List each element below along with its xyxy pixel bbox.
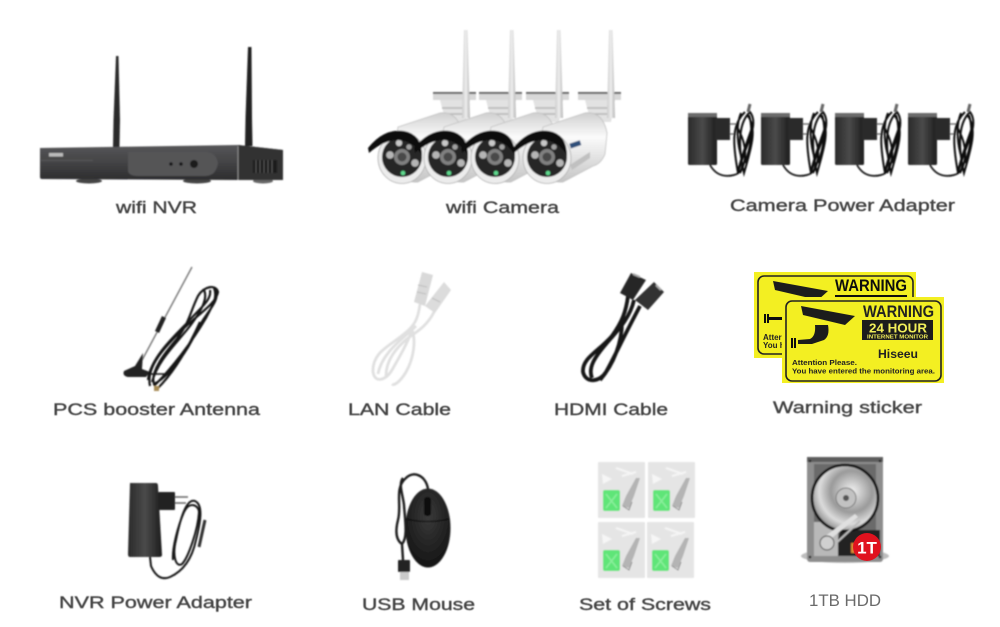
icon: four camera power adapters: [688, 104, 973, 176]
panel: wifi Camera: [368, 30, 621, 217]
icon: back warning sticker: Atter: [763, 333, 782, 342]
icon: booster antenna with coiled cable: [124, 267, 218, 391]
label: wifi NVR: wifi NVR: [115, 198, 197, 217]
panel: LAN Cable: [348, 272, 451, 419]
icon: front warning sticker: WARNING: [863, 303, 934, 321]
icon: wifi NVR recorder: [40, 47, 283, 184]
label: LAN Cable: LAN Cable: [348, 400, 451, 419]
panel: PCS booster Antenna: [53, 267, 261, 419]
icon: white LAN cable: [373, 272, 451, 384]
label: wifi Camera: wifi Camera: [445, 198, 560, 217]
icon: front warning sticker: [782, 297, 944, 383]
icon: front warning sticker: You have entered the monitoring area.: [792, 366, 935, 376]
icon: front warning sticker: 24 HOUR: [869, 320, 928, 336]
badge: 1T: 1T: [857, 538, 878, 558]
icon: four screw bags: [598, 462, 695, 578]
label: HDMI Cable: HDMI Cable: [554, 400, 668, 419]
label: Camera Power Adapter: Camera Power Adapter: [730, 196, 955, 215]
badge: 1T: [853, 533, 881, 561]
label: Warning sticker: Warning sticker: [773, 398, 922, 417]
icon: front warning sticker: INTERNET MONITOR: [867, 334, 928, 340]
panel: NVR Power Adapter: [59, 483, 252, 612]
icon: hard disk drive with 1T badge: [801, 457, 889, 563]
panel: HDMI Cable: [554, 273, 668, 419]
panel: 1TB HDD: [801, 457, 889, 610]
icon: NVR power adapter: [128, 483, 205, 578]
panel: Set of Screws: [579, 462, 711, 614]
icon: back warning sticker: WARNING: [835, 277, 907, 295]
label: NVR Power Adapter: NVR Power Adapter: [59, 593, 252, 612]
panel: Camera Power Adapter: [688, 104, 973, 215]
icon: front warning sticker: Hiseeu: [878, 349, 918, 361]
icon: four wifi bullet cameras: [368, 30, 621, 184]
panel: wifi NVR: [40, 47, 283, 217]
icon: front warning sticker: Attention Please.: [792, 358, 857, 367]
label: Set of Screws: Set of Screws: [579, 595, 711, 614]
icon: USB mouse: [396, 474, 450, 580]
icon: back warning sticker: You h: [763, 341, 785, 350]
label: USB Mouse: USB Mouse: [362, 595, 475, 614]
icon: back warning sticker: [754, 272, 916, 358]
icon: black HDMI cable: [583, 273, 664, 380]
panel: USB Mouse: [362, 474, 475, 614]
label: PCS booster Antenna: PCS booster Antenna: [53, 400, 261, 419]
label: 1TB HDD: 1TB HDD: [809, 591, 881, 610]
panel: Warning sticker: [754, 272, 944, 417]
